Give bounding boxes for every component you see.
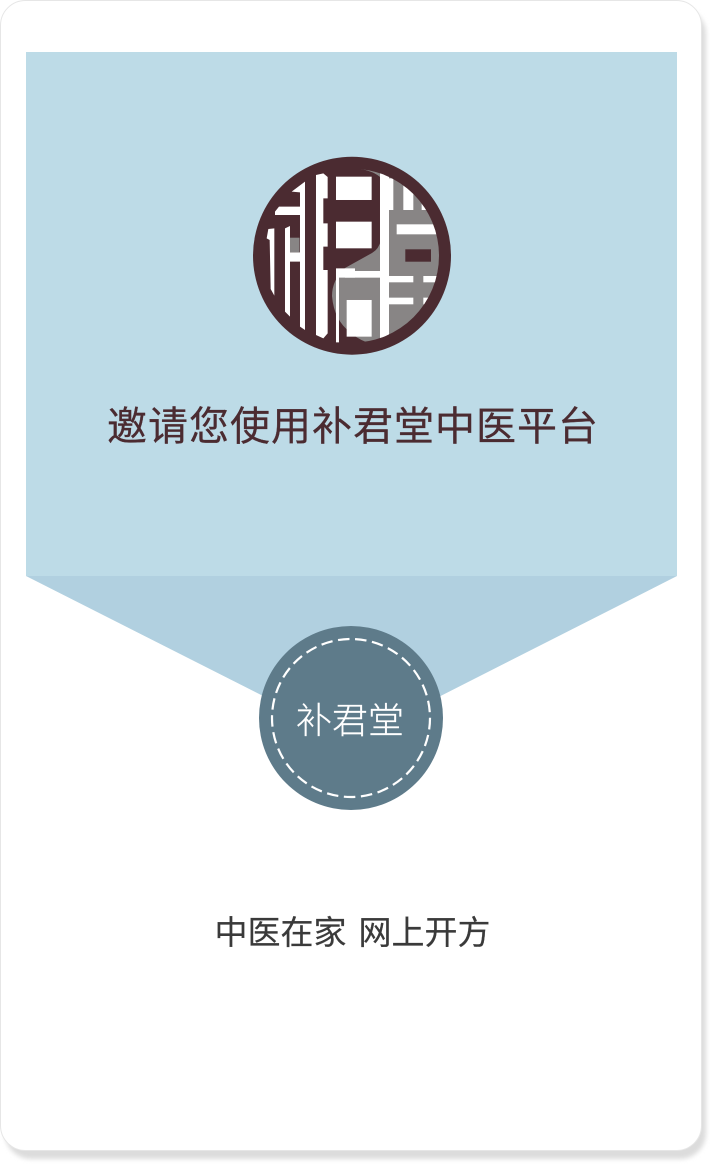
logo right glyph strokes <box>345 173 443 338</box>
logo disc <box>253 157 451 355</box>
tagline: 中医在家 网上开方 <box>214 914 490 951</box>
icon: logo seal <box>253 157 460 355</box>
badge text: 补君堂 <box>296 700 404 741</box>
logo grey square <box>290 238 300 252</box>
logo left glyph strokes <box>267 173 372 342</box>
badge dashed ring <box>272 639 430 797</box>
panel: blue header <box>26 52 677 576</box>
seal badge <box>259 626 443 810</box>
title: 邀请您使用补君堂中医平台 <box>107 405 599 449</box>
logo grey yin-yang swirl <box>332 169 439 342</box>
envelope flap <box>26 576 677 741</box>
logo centre dark bar <box>405 249 431 262</box>
badge disc <box>259 626 443 810</box>
